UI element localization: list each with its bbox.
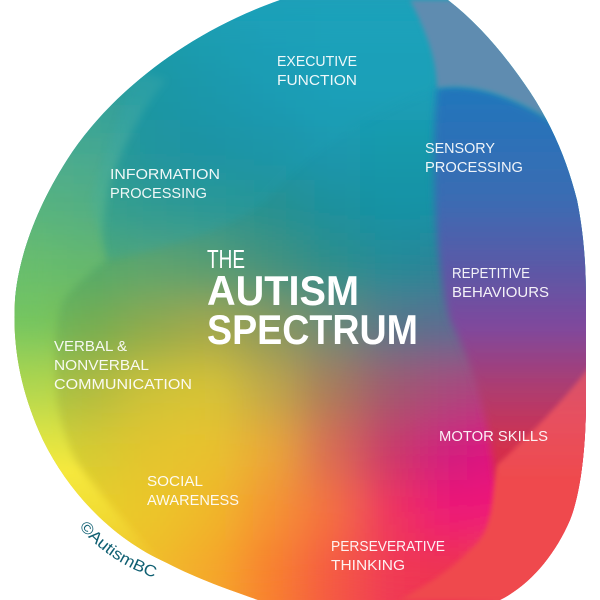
- label: social awareness: SOCIAL: [147, 473, 203, 490]
- label: perseverative thinking: PERSEVERATIVE: [331, 538, 445, 555]
- blue to purple region: [430, 86, 586, 480]
- label: repetitive behaviours: REPETITIVE: [452, 265, 530, 282]
- label: executive function: EXECUTIVE: [277, 53, 357, 70]
- left rim: [14, 76, 160, 545]
- label: perseverative thinking: THINKING: [331, 557, 405, 574]
- label: social awareness: AWARENESS: [147, 492, 239, 509]
- label: repetitive behaviours: [452, 265, 549, 301]
- label: sensory processing: SENSORY: [425, 140, 495, 157]
- title: THE: [207, 244, 245, 274]
- label: perseverative thinking: [331, 538, 445, 574]
- label: verbal and nonverbal communication: VERBAL &: [54, 338, 127, 355]
- label: repetitive behaviours: BEHAVIOURS: [452, 284, 549, 301]
- label: verbal and nonverbal communication: [54, 338, 192, 393]
- label: motor skills: MOTOR SKILLS: [439, 428, 548, 445]
- label: sensory processing: PROCESSING: [425, 159, 523, 176]
- label: information processing: [110, 166, 220, 202]
- title: AUTISM: [207, 267, 359, 314]
- label: information processing: PROCESSING: [110, 185, 207, 202]
- label: sensory processing: [425, 140, 523, 176]
- copyright curved text: ©AutismBC: [81, 522, 156, 576]
- bottom right red region: [405, 368, 586, 600]
- label: verbal and nonverbal communication: NONVERBAL: [54, 357, 149, 374]
- label: social awareness: [147, 473, 239, 509]
- top right rim: [409, 0, 546, 120]
- label: information processing: INFORMATION: [110, 166, 220, 183]
- label: executive function: FUNCTION: [277, 72, 357, 89]
- teal band above inner curve: [102, 174, 218, 257]
- title: SPECTRUM: [207, 306, 418, 353]
- title: [207, 244, 418, 353]
- label: verbal and nonverbal communication: COMMUNICATION: [54, 376, 192, 393]
- label: executive function: [277, 53, 357, 89]
